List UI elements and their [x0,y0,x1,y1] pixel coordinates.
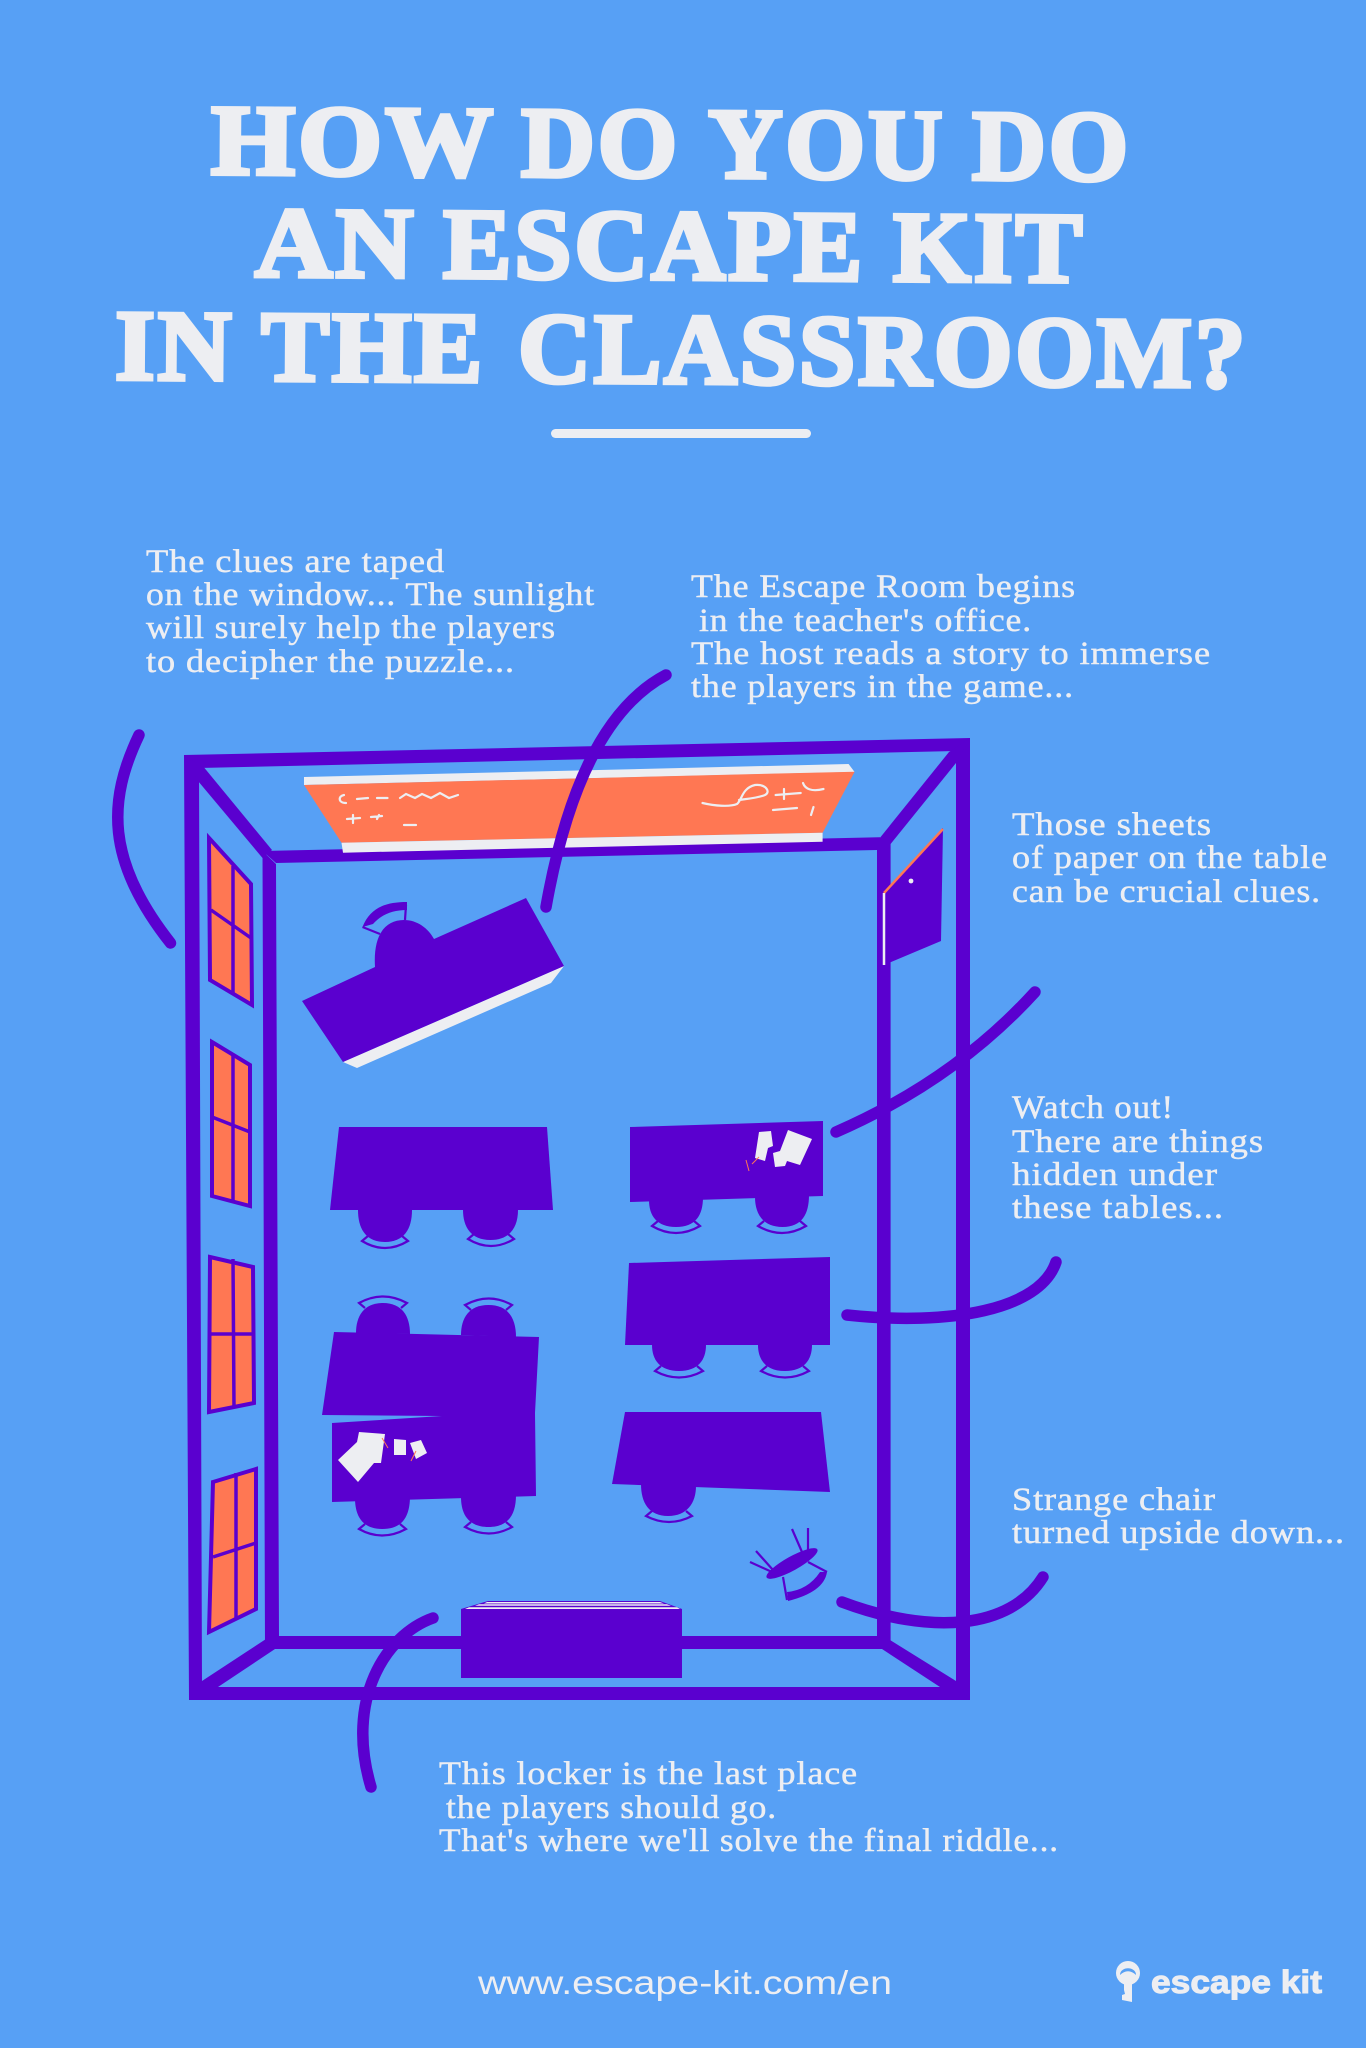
title: YOU [708,88,946,201]
double table left with papers and chairs [322,1296,539,1536]
window 3 [209,1257,254,1412]
window 4 [209,1469,256,1632]
back wall rectangle [262,837,891,1649]
arrow to papers [836,992,1035,1132]
text: teacher's office: The Escape Room begins [691,569,1076,605]
table bottom right with chair [612,1412,830,1522]
text: locker: the players should go. [446,1790,777,1826]
icon: key [1116,1961,1140,2002]
text: sheets of paper: Those sheets [1012,807,1212,843]
text: hidden under tables: There are things [1012,1124,1264,1160]
text: strange chair [1012,1482,1345,1551]
window 1 [209,838,252,1005]
title: IN [115,290,235,402]
text: window clues: to decipher the puzzle... [146,644,515,680]
text: strange chair: Strange chair [1012,1482,1216,1518]
text: hidden under tables: hidden under [1012,1157,1218,1193]
window 2 [212,1042,250,1206]
title: CLASSROOM? [518,293,1249,409]
table top right with papers [630,1121,823,1233]
text: teacher's office: in the teacher's office. [699,603,1032,639]
text: teacher's office [691,569,1211,705]
table top left with chairs [330,1127,553,1248]
title: DO [972,90,1132,202]
footer url: www.escape-kit.com/en [477,1964,892,2001]
title: HOW [211,85,497,198]
classroom illustration [118,675,1056,1787]
room frame [184,738,970,1700]
text: window clues: The clues are taped [146,544,445,580]
text: teacher's office: The host reads a story to immerse [691,636,1211,672]
text: sheets of paper: can be crucial clues. [1012,874,1321,910]
papers on table [338,1432,427,1482]
arrow to teacher's desk [546,675,666,907]
upside-down chair [750,1528,827,1601]
logo wordmark: escape kit [1151,1964,1322,2000]
text: hidden under tables: these tables... [1012,1190,1224,1226]
text: teacher's office: the players in the game... [691,669,1074,705]
text: hidden under tables [1012,1090,1264,1226]
text: locker: This locker is the last place [439,1756,858,1792]
title: THE [261,291,486,404]
title: ESCAPE [443,188,866,302]
arrow to tables [847,1262,1056,1318]
text: window clues: on the window... The sunlight [146,577,595,613]
windows [209,838,256,1632]
text: locker: That's where we'll solve the final riddle... [439,1823,1059,1859]
teacher's desk [302,898,564,1068]
door [884,828,943,965]
sheets of paper [746,1130,812,1171]
chalk scribbles [340,783,824,825]
locker [461,1601,682,1678]
text: locker [439,1756,1059,1859]
arrow to locker [363,1618,433,1787]
arrow to window [118,735,170,943]
callout arrows [118,675,1056,1787]
text: window clues [146,544,595,680]
door knob [909,879,913,883]
title: DO [521,87,681,199]
title: KIT [893,192,1086,304]
arrow to chair [842,1577,1043,1623]
text: sheets of paper [1012,807,1328,910]
title [115,85,1249,409]
title: AN [255,187,417,299]
text: sheets of paper: of paper on the table [1012,840,1328,876]
blackboard [304,764,855,853]
text: hidden under tables: Watch out! [1012,1090,1174,1126]
text: window clues: will surely help the players [146,610,556,646]
table middle right with chairs [625,1257,830,1378]
ceiling and floor perspective lines [184,738,970,1700]
title underline [551,429,811,438]
teacher's chair back [362,902,407,927]
logo [1116,1961,1322,2002]
text: strange chair: turned upside down... [1012,1515,1345,1551]
